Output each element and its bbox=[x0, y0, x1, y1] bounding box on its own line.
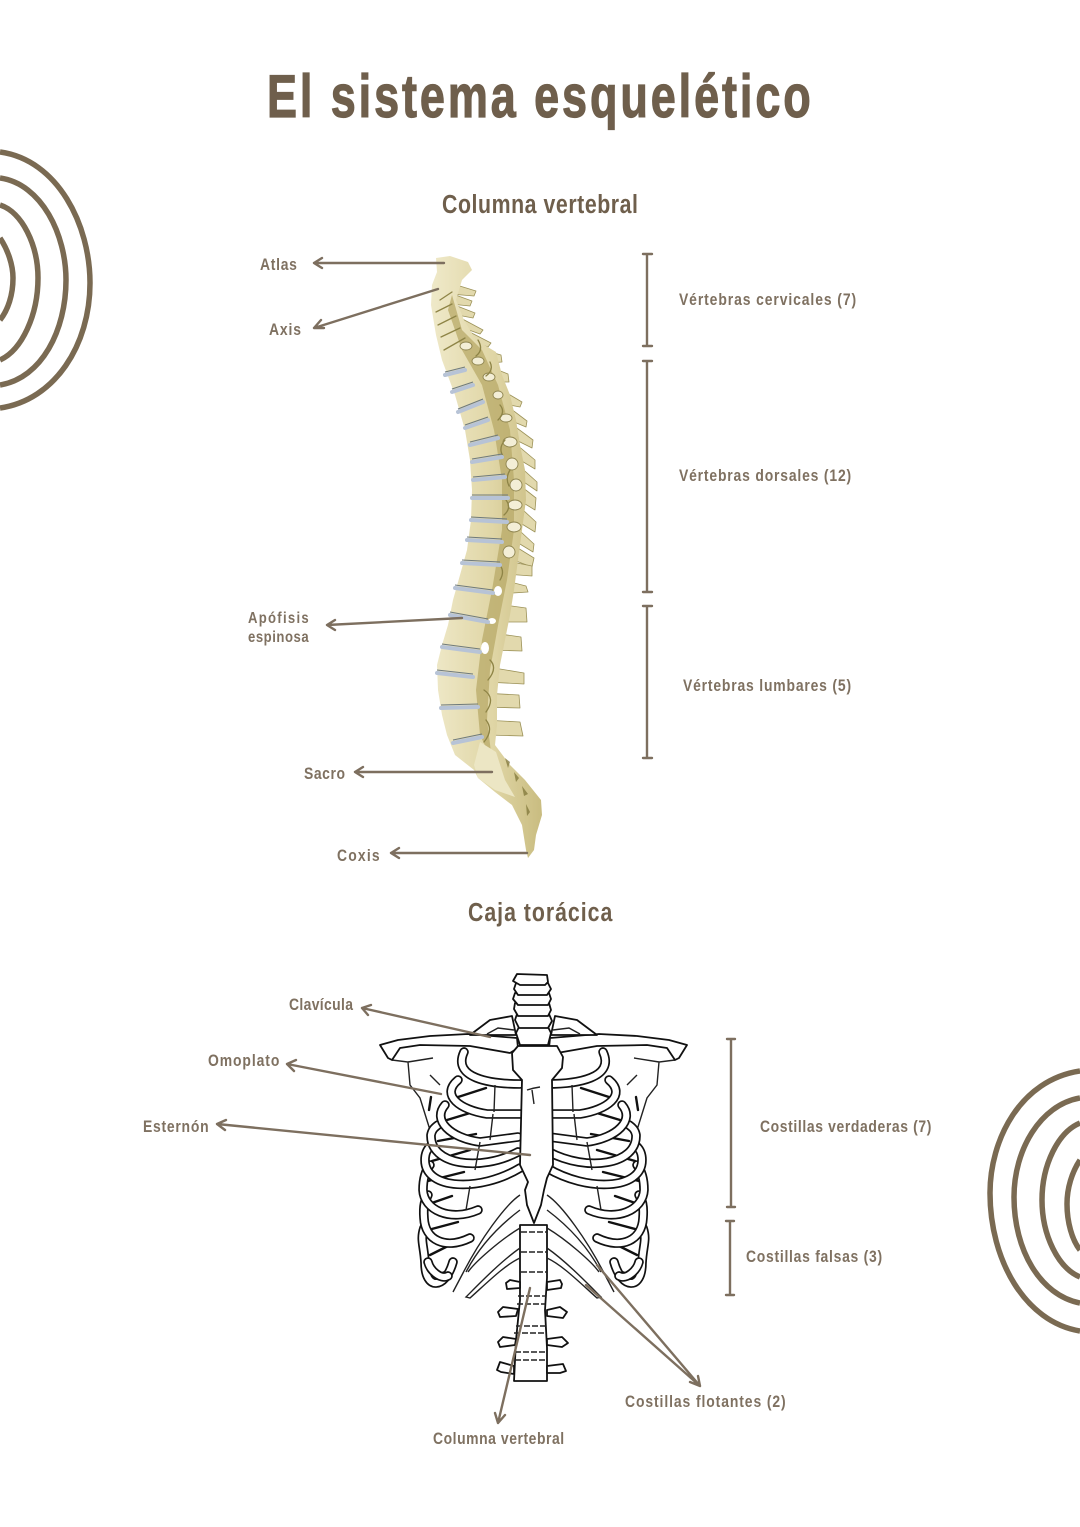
decorative concentric arcs right bbox=[990, 1071, 1080, 1331]
arrow: Atlas bbox=[314, 258, 444, 268]
scapula and ribs left bbox=[380, 1016, 520, 1298]
label: costillas falsas: Costillas falsas (3) bbox=[746, 1248, 882, 1266]
label: columna vertebral: Columna vertebral bbox=[433, 1430, 564, 1448]
label: Atlas: Atlas bbox=[260, 256, 297, 274]
arrow: Esternon bbox=[217, 1120, 530, 1155]
bracket: cervical bbox=[643, 254, 652, 346]
label: Esternon: Esternón bbox=[143, 1118, 209, 1136]
cervical vertebrae bbox=[513, 974, 552, 1045]
label: Clavicula: Clavícula bbox=[289, 996, 353, 1014]
sternum bbox=[512, 1046, 563, 1223]
sacrum bbox=[474, 742, 515, 797]
heading: Columna vertebral: Columna vertebral bbox=[442, 190, 638, 220]
heading: Caja toracica: Caja torácica bbox=[468, 898, 613, 928]
label: Axis: Axis bbox=[269, 321, 301, 339]
illustration: vertebral column bbox=[431, 256, 542, 858]
bracket: costillas verdaderas bbox=[727, 1039, 735, 1207]
label: Apofisis espinosa: Apófisis bbox=[248, 610, 309, 627]
label: cervical: Vértebras cervicales (7) bbox=[679, 291, 856, 309]
bracket: dorsal bbox=[643, 361, 652, 592]
costal margin and floating ribs bbox=[453, 1195, 520, 1298]
lower thoracic spine bbox=[497, 1225, 568, 1381]
arrow: Axis bbox=[314, 289, 438, 328]
bracket: lumbar bbox=[643, 606, 652, 758]
label: Omoplato: Omoplato bbox=[208, 1052, 279, 1070]
neural arch shading bbox=[448, 295, 514, 760]
scapula and ribs right (mirror) bbox=[547, 1016, 687, 1298]
label: Sacro: Sacro bbox=[304, 765, 345, 783]
facet joints and articular processes bbox=[436, 292, 522, 742]
decorative concentric arcs left bbox=[0, 152, 90, 408]
label: Apofisis espinosa bbox=[248, 610, 309, 646]
intervertebral discs bbox=[437, 367, 508, 743]
arrow: Sacro bbox=[355, 767, 492, 777]
label: Coxis: Coxis bbox=[337, 847, 380, 865]
arrow: columna vertebral bbox=[495, 1288, 530, 1423]
label: dorsal: Vértebras dorsales (12) bbox=[679, 467, 851, 485]
clavicle bbox=[380, 1034, 518, 1060]
vertebral bodies bbox=[431, 256, 542, 858]
title: El sistema esquelético bbox=[267, 64, 811, 131]
label: costillas verdaderas: Costillas verdaderas (7) bbox=[760, 1118, 931, 1136]
label: Apofisis espinosa: espinosa bbox=[248, 629, 309, 646]
arrows: costillas flotantes bbox=[586, 1265, 700, 1386]
bracket: costillas falsas bbox=[726, 1221, 734, 1295]
arrow: Clavicula bbox=[362, 1005, 490, 1037]
arrow: Omoplato bbox=[287, 1060, 441, 1094]
illustration: rib cage bbox=[380, 974, 687, 1381]
label: lumbar: Vértebras lumbares (5) bbox=[683, 677, 851, 695]
spinous processes bbox=[450, 283, 537, 736]
arrow: Apofisis espinosa bbox=[327, 618, 462, 630]
label: costillas flotantes: Costillas flotantes (2) bbox=[625, 1393, 786, 1411]
arrow: Coxis bbox=[391, 848, 527, 858]
